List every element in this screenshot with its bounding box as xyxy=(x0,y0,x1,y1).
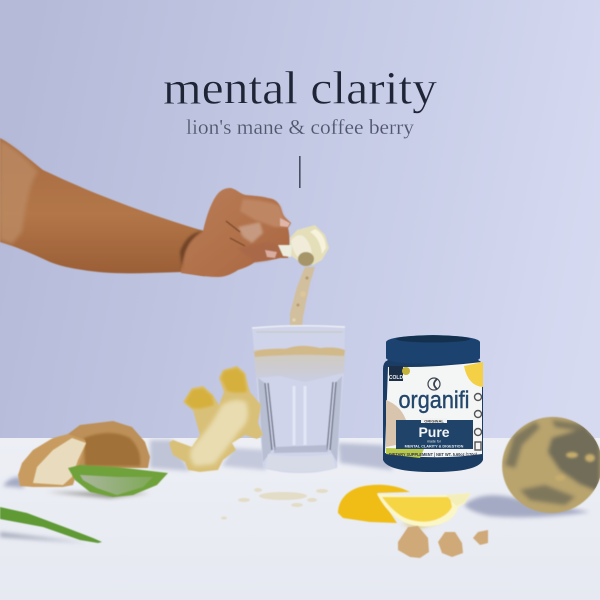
lemon wedge xyxy=(377,493,471,526)
lion's mane mushroom xyxy=(18,421,150,487)
mushroom inner xyxy=(33,438,86,485)
product name: Pure xyxy=(418,424,450,440)
glass of water xyxy=(252,326,345,473)
table shadows xyxy=(0,440,590,543)
glass base xyxy=(265,454,336,472)
brand name: organifi xyxy=(398,387,470,414)
jar: ORIGINAL xyxy=(424,418,444,424)
water bottom xyxy=(274,445,328,453)
white label xyxy=(385,362,482,457)
powder stream xyxy=(290,267,315,337)
arm and hand xyxy=(0,138,291,277)
glass facets xyxy=(265,382,336,450)
upper arm crease xyxy=(0,140,38,244)
coffee berry crumbs xyxy=(398,526,488,558)
rice crumbs xyxy=(221,488,328,520)
foam layer xyxy=(254,348,345,382)
title: mental clarity xyxy=(163,62,438,114)
palm fold xyxy=(238,222,263,243)
thumbnail xyxy=(265,250,277,258)
powder on water xyxy=(254,346,345,357)
jar: COLD xyxy=(389,375,403,381)
arm xyxy=(0,138,205,276)
navy panel xyxy=(396,420,473,449)
fingernail xyxy=(280,218,290,227)
index finger xyxy=(240,199,290,227)
aloe slice xyxy=(68,465,168,497)
original tag xyxy=(421,418,447,423)
green leaf strip xyxy=(386,448,424,458)
purpose text: MENTAL CLARITY & DIGESTION xyxy=(405,444,464,448)
thumb xyxy=(237,242,281,262)
made for: made for xyxy=(427,440,442,444)
divider line xyxy=(299,156,301,188)
jar xyxy=(383,335,483,472)
gold tab xyxy=(389,366,403,381)
mushroom art on label xyxy=(386,400,407,447)
jar lid xyxy=(386,335,480,364)
swirl logo xyxy=(428,378,440,390)
jar body xyxy=(383,360,483,472)
melon fruit xyxy=(501,416,600,514)
hand xyxy=(181,188,291,277)
finger fold shadow xyxy=(226,221,245,246)
certification badges xyxy=(474,394,482,450)
glass body xyxy=(252,326,345,473)
supplement line: DIETARY SUPPLEMENT | NET WT. 5.60oz (170g) xyxy=(389,452,478,457)
hand shadow at wrist xyxy=(180,231,203,270)
mushroom front xyxy=(18,434,86,487)
scoop xyxy=(278,225,329,266)
side walls xyxy=(258,376,342,462)
ginger xyxy=(169,366,263,472)
lid opening xyxy=(396,336,470,342)
lemon half xyxy=(338,485,410,523)
mushroom back xyxy=(68,421,150,468)
aloe leaf xyxy=(0,507,102,543)
glass rim xyxy=(252,326,345,328)
table surface xyxy=(0,438,600,600)
subtitle: lion's mane & coffee berry xyxy=(186,115,415,139)
lemon on label xyxy=(464,362,483,387)
